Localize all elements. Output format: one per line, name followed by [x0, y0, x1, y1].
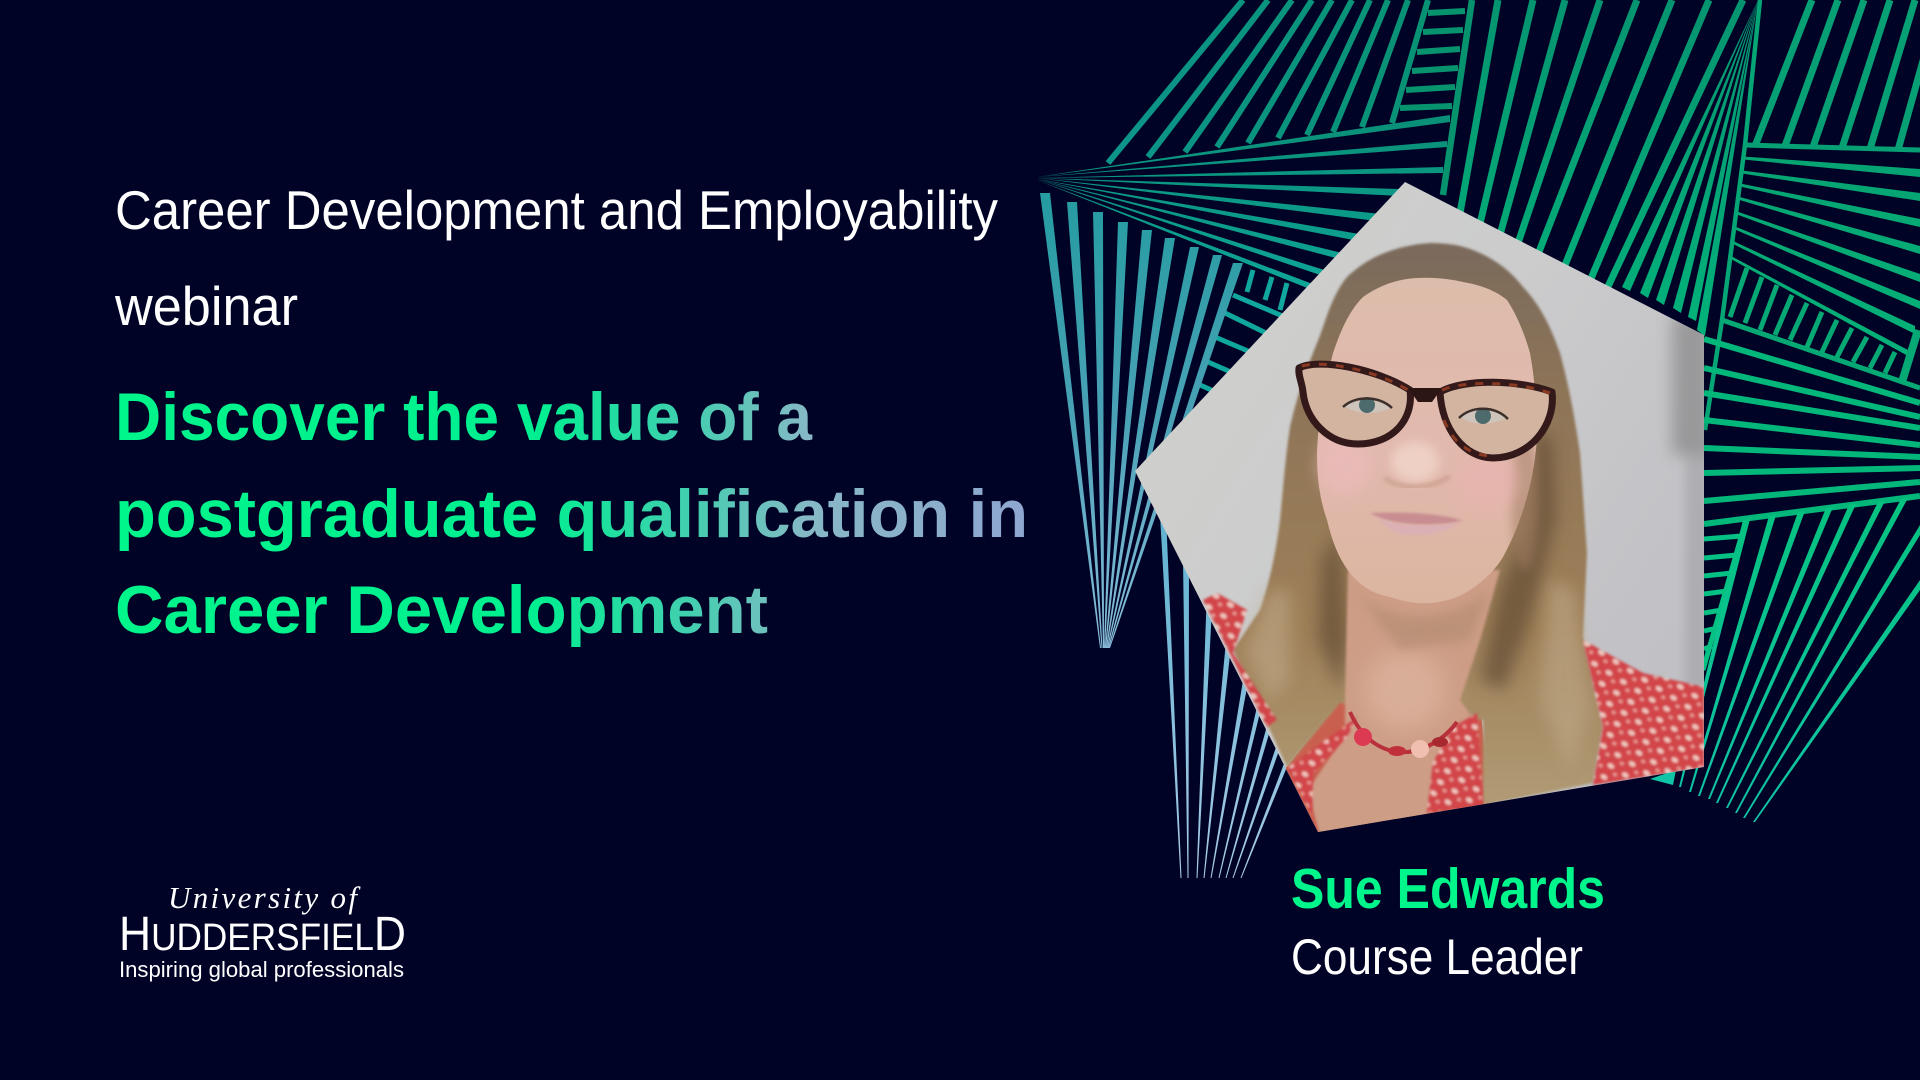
main heading: Career Development [115, 572, 768, 648]
main heading: Discover the value of a [115, 379, 813, 455]
intro text: webinar title: Career Development and Employability [115, 179, 998, 241]
photo: portrait of Sue Edwards in pentagon frame [1130, 180, 1712, 840]
eye: left [1343, 397, 1392, 413]
tortoiseshell accents [1302, 364, 1550, 456]
hair dark strands [1318, 430, 1556, 690]
photo background wall [1130, 180, 1710, 840]
logo: University of Huddersfield: HUDDERSFIELD [119, 908, 406, 961]
eye: right [1459, 408, 1508, 424]
hair light strands [1245, 580, 1590, 770]
lines: bottom right ladder [1704, 536, 1742, 649]
lines: lower right fan [1704, 339, 1920, 524]
shirt left shoulder [1203, 593, 1277, 727]
logo: University of Huddersfield [119, 880, 406, 982]
chest and collar underlay [1280, 700, 1490, 840]
mouth [1370, 513, 1463, 535]
lines: small teal corner under photo [1650, 770, 1676, 785]
lines: left ladder [1200, 270, 1287, 396]
glasses [1299, 364, 1552, 458]
lines: right ladder end post [1902, 330, 1918, 382]
lines: right fan [1730, 156, 1920, 356]
speaker role: Course Leader [1291, 929, 1583, 985]
bridge [1408, 388, 1442, 402]
lens: left [1299, 364, 1410, 444]
geometric line pattern [1037, 0, 1920, 878]
cheek blush and nose highlight [1311, 440, 1522, 500]
lines: right ladder [1722, 268, 1920, 388]
lines: lower left fan [1160, 515, 1298, 878]
hair [1233, 243, 1603, 805]
lines: left fan to lower apex [1040, 193, 1243, 648]
logo: University of Huddersfield: University of [168, 880, 361, 915]
neck and chest [1308, 570, 1500, 836]
shirt placket [1427, 713, 1483, 813]
necklace [1350, 712, 1457, 758]
lines: top-right horizontal band [1745, 145, 1920, 150]
lines: narrow fan from top apex [1622, 0, 1758, 336]
lines: bottom right ladder post [1703, 520, 1746, 670]
lines: spine on the right of the narrow fan [1705, 0, 1760, 430]
main heading [115, 379, 1028, 648]
lines: top-right group [1755, 0, 1920, 150]
photo right edge shadow, lower [1684, 450, 1704, 687]
shirt lower left collar [1287, 717, 1357, 815]
lines: fan from left apex [1037, 115, 1450, 325]
speaker name: Sue Edwards [1291, 857, 1605, 921]
under chin shadow [1371, 598, 1484, 650]
face [1317, 278, 1537, 603]
main heading: postgraduate qualification in [115, 476, 1028, 552]
right side face shadow [1511, 430, 1539, 570]
lines: top centre group [1457, 0, 1743, 295]
lens: right [1440, 382, 1552, 458]
lines: top-left diagonal group [1108, 0, 1428, 163]
intro text: webinar title: webinar [114, 275, 298, 337]
shirt right shoulder [1583, 640, 1704, 785]
lines: ladder right post [1443, 0, 1472, 195]
intro text: webinar title [114, 179, 998, 337]
photo right edge shadow, upper [1672, 315, 1712, 455]
neck highlight [1365, 650, 1445, 730]
logo: University of Huddersfield: Inspiring global professionals [119, 957, 404, 982]
lines: top ladder rungs [1400, 11, 1465, 108]
lines: bottom right converging fan [1679, 498, 1920, 822]
